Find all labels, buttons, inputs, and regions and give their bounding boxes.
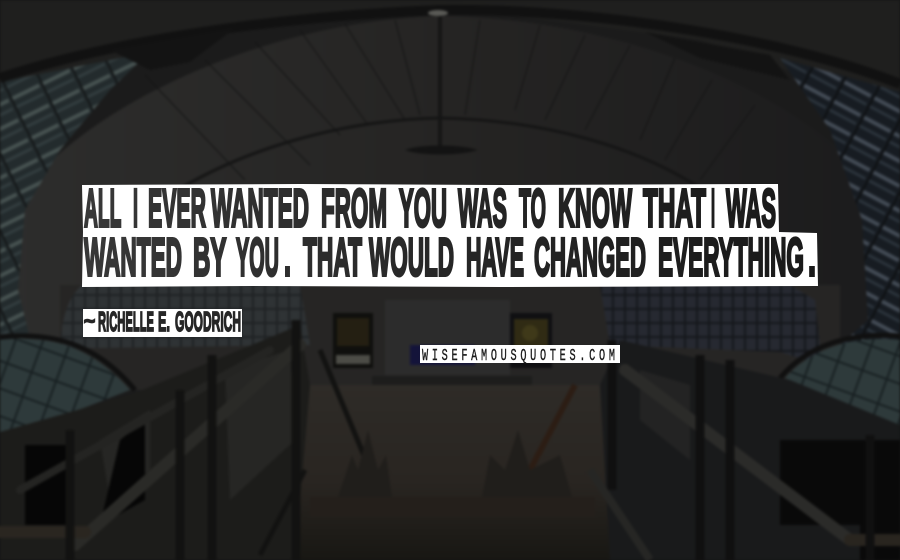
right handrails: [625, 370, 900, 540]
quote line two: .: [284, 228, 291, 288]
quote line two: HAVE: [466, 228, 524, 288]
blue sign: [410, 345, 475, 365]
central suspension: [438, 15, 442, 150]
quote line one: WAS: [458, 178, 507, 238]
right lit patches: [640, 370, 690, 460]
left deep shadow: [25, 420, 145, 525]
quote line one: WANTED: [211, 178, 309, 238]
quote line one: TO: [519, 178, 546, 238]
hall floor: [290, 385, 610, 560]
left escalator glass: [0, 339, 130, 432]
distant hall: [60, 285, 840, 390]
left inner lattice band: [60, 285, 310, 348]
left poster: [333, 313, 373, 368]
quote line one: YOU: [399, 178, 447, 238]
right escalator glass: [785, 339, 900, 425]
quote line one: FROM: [321, 178, 387, 238]
quote line two: BY: [193, 228, 226, 288]
quote line one: KNOW: [558, 178, 632, 238]
left glazing band: [0, 52, 150, 342]
lobby figures right: [482, 430, 572, 497]
right inner lattice band: [600, 285, 822, 365]
source credit: WISEFAMOUSQUOTES.COM: [422, 347, 619, 366]
left lit patches: [100, 350, 295, 500]
quote line two: WANTED: [84, 228, 182, 288]
quote line two: .: [808, 228, 816, 288]
inner ring: [170, 118, 710, 195]
ceiling ribs: [145, 20, 755, 180]
right balustrade: [600, 340, 900, 560]
right glazing band: [780, 58, 900, 345]
left handrails: [0, 345, 300, 545]
quote line one: ALL: [84, 178, 121, 238]
author attribution: ~: [84, 311, 95, 331]
quote line one: I: [133, 178, 138, 238]
quotation block: WAS: [726, 178, 776, 238]
right posts: [530, 340, 870, 560]
quote line two: YOU: [236, 228, 279, 288]
rim dark panels: [110, 28, 790, 80]
quote line two: CHANGED: [534, 228, 646, 288]
quote line two: WOULD: [369, 228, 454, 288]
ceiling interior: [0, 16, 900, 350]
left posts: [70, 320, 370, 560]
right poster: [510, 313, 552, 368]
quote line two: THAT: [303, 228, 362, 288]
roof outer shell: [0, 0, 900, 110]
white strip: line one: [82, 184, 818, 287]
right deep shadow: [780, 440, 900, 560]
author attribution: E.: [158, 306, 170, 337]
quote line one: I: [711, 178, 715, 238]
quote line one: THAT: [643, 178, 706, 238]
quote line one: EVER: [148, 178, 206, 238]
lobby figures left: [338, 430, 392, 497]
infographic stage: GOODRICH: [175, 306, 241, 337]
left balustrade: [0, 325, 310, 560]
roof dark rim: [0, 10, 900, 84]
quotation block: [82, 178, 819, 288]
author attribution: RICHELLE: [98, 306, 154, 337]
